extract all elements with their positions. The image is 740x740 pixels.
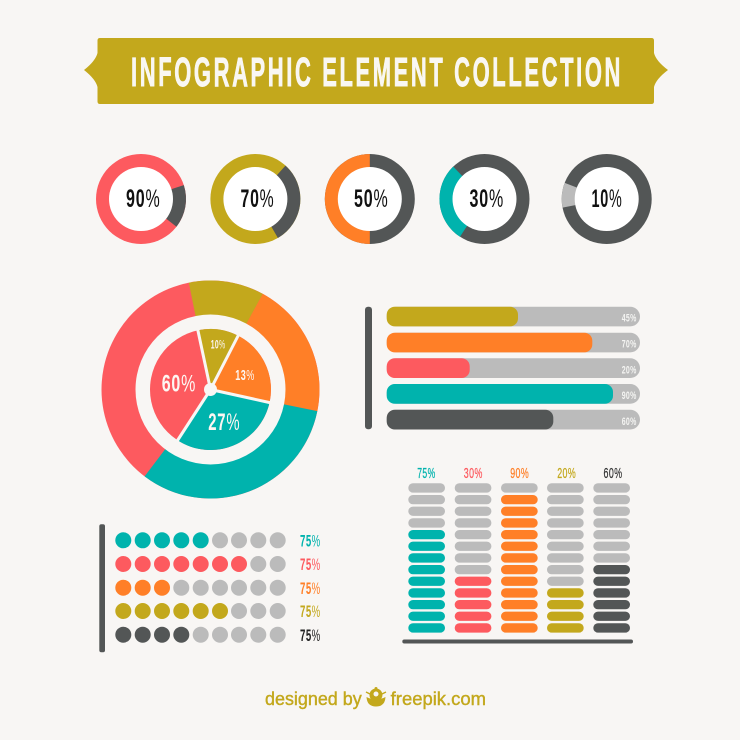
axis bar [99, 524, 105, 652]
bar: 70%: 70% [622, 339, 637, 351]
dot matrix chart [99, 524, 321, 652]
column: 20% [547, 466, 584, 633]
footer credit: designed by [265, 689, 362, 709]
bar: 60% [387, 410, 640, 430]
large ring and pie chart [102, 280, 320, 499]
donut gauge: 10%: 10% [592, 185, 622, 213]
bar: 20%: 20% [622, 364, 637, 376]
icon: freepik mascot [366, 687, 386, 706]
column: 75% [408, 466, 445, 633]
outer ring [102, 280, 320, 499]
axis bar [365, 307, 372, 429]
horizontal bar chart [365, 307, 640, 430]
footer credit [265, 687, 486, 709]
pie label: 13%: 13% [235, 367, 255, 384]
bar: 90% [387, 384, 640, 404]
bar: 45%: 45% [622, 313, 637, 325]
stacked pill column chart [402, 466, 633, 644]
bar: 60%: 60% [622, 416, 637, 428]
donut gauge: 30% [439, 154, 530, 244]
dot row: teal [115, 532, 321, 550]
donut gauge: 50%: 50% [354, 185, 388, 213]
dot row: orange [115, 580, 321, 598]
dot row: teal: 75% [300, 532, 321, 550]
pie label: 27%: 27% [208, 409, 240, 436]
dot row: red [115, 556, 321, 574]
column: 30% [455, 466, 491, 633]
dot row: gold: 75% [300, 603, 321, 621]
inner pie [150, 328, 272, 450]
donut gauge: 70% [210, 154, 300, 244]
dot row: dark: 75% [300, 627, 321, 645]
dot row: orange: 75% [300, 580, 321, 598]
bar: 20% [387, 358, 640, 378]
column: 60% [593, 466, 630, 633]
donut gauge: 70%: 70% [240, 185, 274, 213]
column: 20%: 20% [557, 466, 576, 482]
donut gauge: 50% [325, 154, 415, 244]
title banner [84, 38, 668, 104]
donut gauge: 90%: 90% [126, 185, 160, 213]
bar: 90%: 90% [622, 390, 637, 402]
pie label: 60%: 60% [162, 370, 196, 398]
dot row: dark [115, 627, 321, 645]
column: 60%: 60% [604, 466, 622, 482]
column: 75%: 75% [417, 466, 436, 482]
donut gauge: 10% [562, 154, 652, 244]
column: 90%: 90% [510, 466, 529, 482]
donut gauge: 90% [96, 154, 186, 244]
column: 90% [501, 466, 538, 633]
column: 30%: 30% [464, 466, 483, 482]
baseline axis [402, 640, 633, 644]
pie label: 10%: 10% [211, 338, 225, 352]
dot row: gold [115, 603, 321, 621]
dot row: red: 75% [300, 556, 321, 574]
footer credit: freepik.com [391, 689, 486, 709]
bar: 70% [387, 333, 640, 352]
donut gauge: 30%: 30% [470, 185, 504, 213]
bar: 45% [387, 307, 640, 326]
